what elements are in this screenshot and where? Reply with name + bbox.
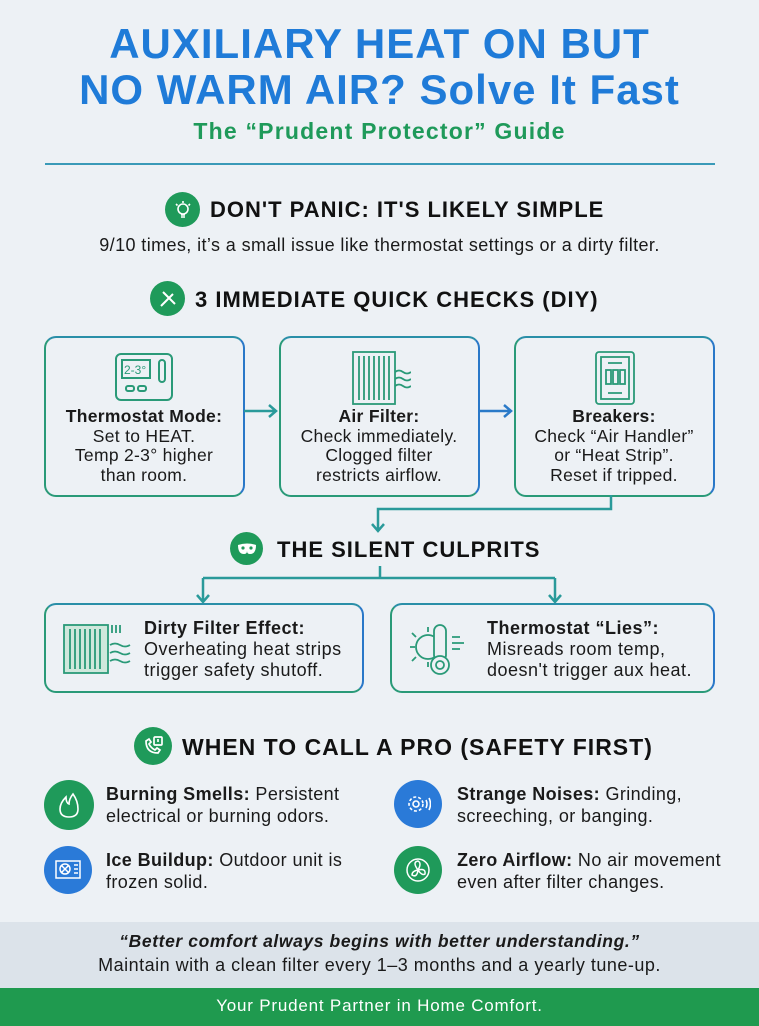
panel: thermostat mode: Temp 2-3° higher	[75, 445, 213, 465]
panel: thermostat mode: than room.	[101, 464, 187, 484]
arrow: connector to culprits	[371, 495, 612, 533]
item: burning smells: Burning Smells: Persistent electrical or burning odors.	[106, 784, 339, 826]
heading: quick checks: 3 IMMEDIATE QUICK CHECKS (DIY)	[195, 287, 599, 312]
panel: thermostat mode: Thermostat Mode:	[66, 406, 222, 426]
panel: breakers	[514, 336, 715, 497]
panel: air filter: Air Filter:	[338, 406, 420, 426]
heading: silent culprits: THE SILENT CULPRITS	[277, 537, 540, 562]
heading: don't panic: DON'T PANIC: IT'S LIKELY SIMPLE	[210, 197, 604, 222]
quote band: “Better comfort always begins with better understanding.”	[119, 931, 640, 951]
icon: flame	[44, 780, 94, 830]
panel: thermostat mode	[44, 336, 245, 497]
panel: breakers: Check “Air Handler”	[534, 426, 694, 446]
heading: silent culprits	[230, 532, 540, 565]
title	[79, 20, 680, 113]
panel: dirty filter effect: Dirty Filter Effect:	[144, 618, 305, 638]
icon: bulb	[165, 192, 200, 227]
footer	[0, 988, 759, 1026]
text: intro: 9/10 times, it’s a small issue like thermostat settings or a dirty filter.	[99, 235, 660, 255]
heading: call a pro	[134, 727, 653, 765]
panel: thermostat lies: Thermostat “Lies”:	[487, 618, 659, 638]
heading: quick checks	[150, 281, 599, 316]
panel: breakers: or “Heat Strip”.	[554, 445, 674, 465]
arrow	[480, 404, 513, 418]
heading: call a pro: WHEN TO CALL A PRO (SAFETY FIRST)	[182, 734, 653, 760]
icon: ac unit	[44, 846, 92, 894]
item: strange noises: screeching, or banging.	[457, 806, 653, 826]
icon: breaker panel	[595, 351, 635, 405]
item: strange noises	[394, 780, 682, 828]
icon: gear	[394, 780, 442, 828]
panel: thermostat lies: doesn't trigger aux heat.	[487, 660, 692, 680]
item: zero airflow	[394, 846, 721, 894]
quote band	[0, 922, 759, 988]
item: strange noises: Strange Noises: Grinding,	[457, 784, 682, 804]
icon: thermostat	[115, 353, 173, 401]
footer: Your Prudent Partner in Home Comfort.	[216, 996, 543, 1015]
panel: thermostat lies: Misreads room temp,	[487, 639, 666, 659]
quote band: Maintain with a clean filter every 1–3 months and a yearly tune-up.	[98, 955, 661, 975]
item: zero airflow: Zero Airflow: No air movement	[457, 850, 721, 870]
icon: filter	[352, 351, 411, 405]
panel: breakers: Breakers:	[572, 406, 656, 426]
icon: tools	[150, 281, 185, 316]
arrow	[244, 404, 278, 418]
icon: thermostat: 2-3°	[124, 363, 146, 377]
panel: dirty filter effect: Overheating heat strips	[144, 639, 342, 659]
panel: thermostat lies	[390, 603, 715, 693]
item: burning smells	[44, 780, 339, 830]
panel: air filter: restricts airflow.	[316, 464, 442, 484]
title: NO WARM AIR? Solve It Fast	[79, 66, 680, 113]
icon: dirty filter	[63, 624, 130, 674]
panel: air filter: Clogged filter	[325, 445, 433, 465]
icon: sun thermometer	[410, 624, 464, 675]
subtitle: The “Prudent Protector” Guide	[193, 118, 566, 144]
item: ice buildup: Ice Buildup: Outdoor unit is frozen solid.	[106, 850, 342, 892]
arrow: split connectors	[196, 566, 562, 603]
panel: dirty filter effect: trigger safety shutoff.	[144, 660, 323, 680]
icon: phone alert	[134, 727, 172, 765]
icon: fan	[394, 846, 442, 894]
panel: dirty filter effect	[44, 603, 364, 693]
item: ice buildup	[44, 846, 342, 894]
panel: breakers: Reset if tripped.	[550, 464, 678, 484]
panel: air filter: Check immediately.	[301, 426, 457, 446]
title: AUXILIARY HEAT ON BUT	[109, 20, 650, 67]
heading: don't panic	[165, 192, 604, 227]
icon: mask	[230, 532, 263, 565]
panel: thermostat mode: Set to HEAT.	[93, 426, 195, 446]
item: zero airflow: even after filter changes.	[457, 872, 665, 892]
panel: air filter	[279, 336, 480, 497]
